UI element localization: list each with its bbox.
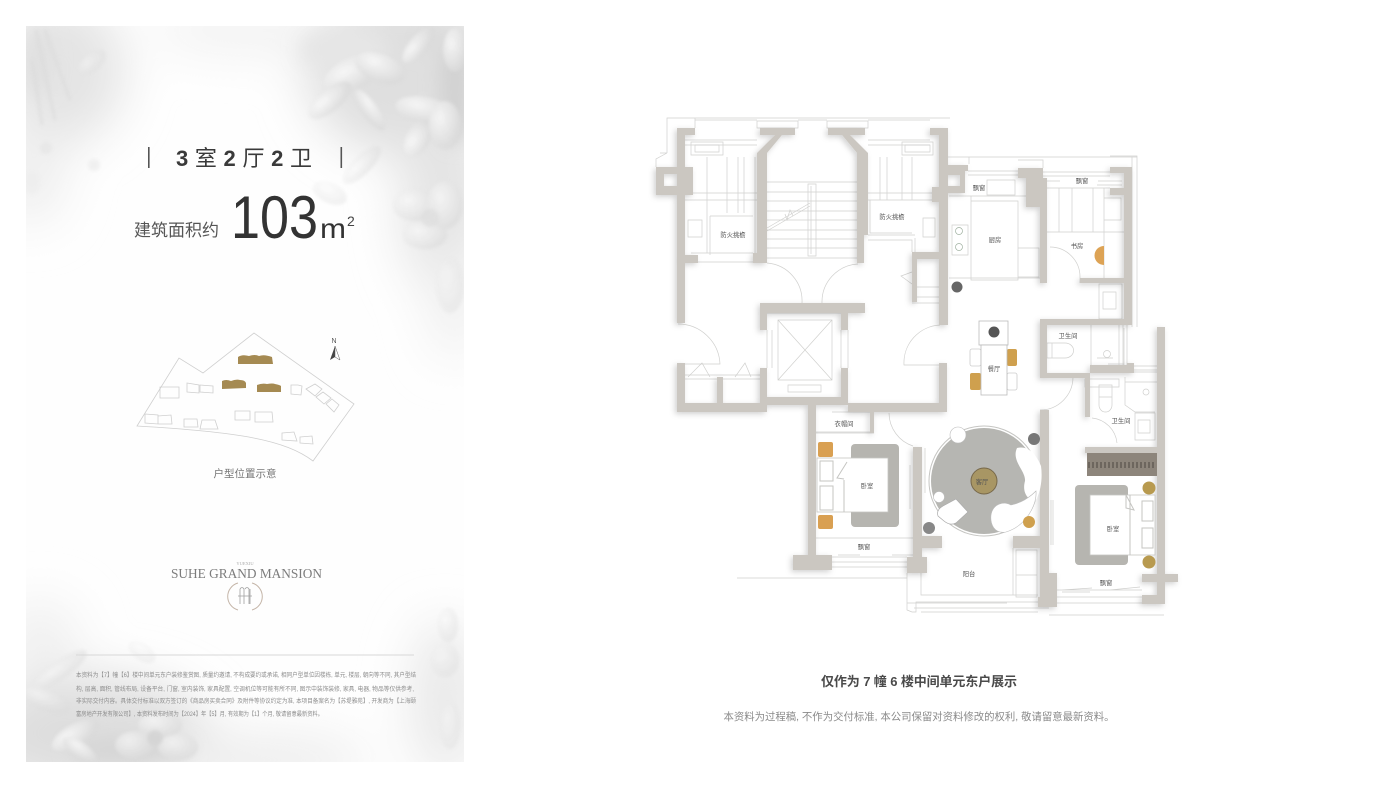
lower left relief flowers bbox=[74, 651, 86, 666]
text: building area 103 m2: 103 bbox=[231, 184, 318, 251]
room labels: 卫生间 bbox=[1059, 331, 1077, 340]
wardrobe bbox=[1087, 453, 1157, 476]
disclaimer: legal notes: 构, 层高, 面积, 管线布局, 设备平台, 门窗, 室内装饰, 家具配置, 空调机位等可能有所不同, 图示中装饰装修, 家具, 电器, 物品等仅供参考, bbox=[76, 685, 414, 693]
panel: floral poster background bbox=[26, 26, 464, 762]
room labels: 卧室 bbox=[861, 481, 873, 490]
furniture: right bedroom bbox=[1075, 482, 1156, 568]
logo: Suhe Grand Mansion: SUHE GRAND MANSION bbox=[171, 567, 322, 582]
right service bay bbox=[902, 142, 933, 155]
highlighted buildings bbox=[222, 355, 281, 392]
disclaimer: legal notes bbox=[76, 654, 416, 718]
caption: location diagram: 户型位置示意 bbox=[214, 467, 276, 480]
floor plan bbox=[656, 118, 1178, 615]
room labels: 客厅 bbox=[976, 477, 988, 486]
bath 1 bbox=[1047, 325, 1127, 387]
room labels: 飘窗 bbox=[858, 542, 870, 551]
room labels: 餐厅 bbox=[988, 364, 1000, 373]
room labels: 防火挑檐 bbox=[720, 230, 746, 239]
text: building area 103 m2: 2 bbox=[347, 213, 355, 229]
heading: room configuration: 3 室 2 厅 2 卫 bbox=[176, 146, 312, 171]
logo: Suhe Grand Mansion bbox=[171, 561, 322, 610]
kitchen bbox=[949, 180, 1040, 280]
furniture: living room bbox=[923, 426, 1042, 536]
room labels: 防火挑檐 bbox=[879, 212, 905, 221]
room labels: 衣帽间 bbox=[835, 419, 853, 428]
upper right relief flowers bbox=[330, 62, 359, 82]
left service bay bbox=[691, 142, 723, 155]
thin linework: windows, balconies and joinery bbox=[656, 118, 1165, 615]
door swings bbox=[678, 247, 1117, 446]
furniture: dining set bbox=[970, 321, 1017, 395]
walls bbox=[656, 128, 1178, 607]
study bbox=[1047, 188, 1124, 319]
disclaimer: legal notes: 富房地产开发有限公司】, 本资料发布时间为【2024】年【5】月, 有效期为【1】个月, 敬请留意最新资料。 bbox=[76, 710, 323, 718]
text: building area 103 m2 bbox=[134, 184, 355, 251]
icon: north arrow bbox=[330, 338, 340, 360]
room labels: 飘窗 bbox=[973, 183, 985, 192]
text: building area 103 m2: 建筑面积约 bbox=[134, 221, 219, 240]
room labels: 阳台 bbox=[963, 569, 975, 578]
room labels: 飘窗 bbox=[1100, 578, 1112, 587]
furniture: kitchen plant bbox=[952, 282, 962, 292]
logo: Suhe Grand Mansion: YUEXIU bbox=[236, 561, 254, 566]
caption: unit display note: 仅作为 7 幢 6 楼中间单元东户展示 bbox=[821, 674, 1017, 689]
room labels: 飘窗 bbox=[1076, 176, 1088, 185]
balcony bbox=[737, 548, 1164, 615]
site plan: unit location map bbox=[137, 333, 354, 461]
upper left sprigs bbox=[32, 30, 70, 125]
room labels: 书房 bbox=[1071, 241, 1083, 250]
lower right relief flowers bbox=[446, 615, 457, 640]
furniture: left bedroom bbox=[817, 442, 899, 529]
lift core bbox=[767, 313, 848, 392]
furniture: study seat bbox=[1094, 246, 1104, 265]
stairs bbox=[767, 182, 858, 258]
disclaimer: legal notes: 本资料为【7】幢【6】楼中间单元东户装修鉴赏图, 质量约邀请, 不构成要约或承诺, 相同户型单位因楼栋, 单元, 楼层, 朝向等不同, 其户型结 bbox=[76, 671, 416, 679]
room labels: 厨房 bbox=[989, 235, 1001, 244]
middle right flower bbox=[393, 189, 437, 221]
icon: north arrow: N bbox=[331, 338, 337, 345]
text: building area 103 m2: m bbox=[320, 213, 346, 244]
room labels bbox=[720, 176, 1130, 587]
room labels: 卧室 bbox=[1107, 524, 1119, 533]
disclaimer: legal notes: 非实际交付内容。具体交付标准以双方签订的《商品房买卖合同》及附件等协议约定为准, 本项目备案名为【苏堤雅苑】, 开发商为【上海颐 bbox=[76, 697, 416, 705]
closet and left bedroom bay bbox=[816, 412, 925, 567]
bath 2 bbox=[1099, 366, 1165, 440]
room labels: 卫生间 bbox=[1112, 416, 1130, 425]
footnote: process document disclaimer: 本资料为过程稿, 不作为交付标准, 本公司保留对资料修改的权利, 敬请留意最新资料。 bbox=[724, 710, 1114, 723]
